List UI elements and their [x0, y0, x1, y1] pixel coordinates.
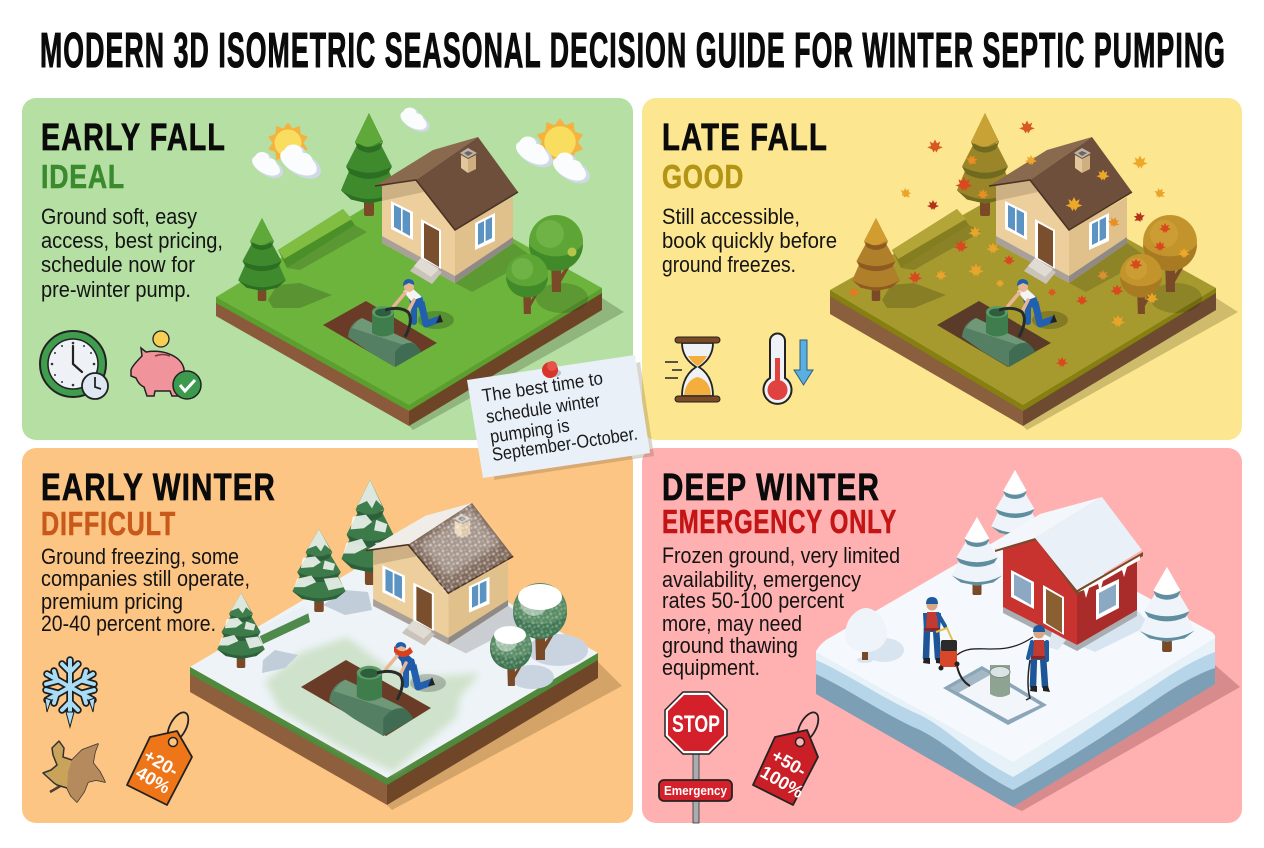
note text: schedule winter: [484, 389, 601, 427]
description text: [662, 543, 900, 680]
description text: Ground freezing, some: [41, 544, 239, 569]
description text: ground freezes.: [662, 252, 796, 277]
illustration: green yard diorama: [216, 113, 624, 430]
description text: 20-40 percent more.: [41, 611, 216, 636]
icon: price tag +50-100%: [753, 709, 823, 805]
heading: late fall: LATE FALL: [662, 117, 828, 159]
description text: equipment.: [662, 655, 760, 680]
description text: companies still operate,: [41, 566, 250, 591]
icon: thermometer with down arrow: [764, 334, 813, 404]
note text: The best time to: [480, 367, 604, 406]
description text: more, may need: [662, 611, 802, 636]
description text: access, best pricing,: [41, 228, 223, 253]
illustration: frosted yard diorama: [190, 480, 622, 810]
illustration: snow-covered yard diorama: [816, 470, 1240, 811]
icon: price tag +20-40%: +20-: [140, 745, 182, 781]
icon: small cloud: [397, 107, 433, 136]
panel: late fall: [642, 98, 1242, 440]
icon: price tag +20-40%: [127, 709, 193, 805]
note text: [480, 367, 639, 465]
heading: early fall: EARLY FALL: [41, 117, 226, 159]
icon: piggy bank: [131, 331, 201, 399]
note text: September-October.: [490, 422, 639, 465]
description text: Frozen ground, very limited: [662, 543, 900, 568]
icon: red push pin: [542, 361, 561, 378]
icon: right sun and cloud: [512, 118, 594, 189]
description text: Still accessible,: [662, 204, 800, 229]
icon: hourglass: [665, 337, 720, 402]
icon: stop sign: [659, 692, 732, 823]
heading: deep winter: DEEP WINTER: [662, 467, 880, 509]
description text: [41, 544, 250, 636]
icon: price tag +50-100%: 100%: [757, 762, 807, 802]
icon: stop sign: Emergency: [664, 783, 728, 798]
description text: pre-winter pump.: [41, 277, 191, 302]
panel: early winter: [22, 448, 633, 823]
status: ideal: IDEAL: [41, 158, 125, 195]
description text: book quickly before: [662, 228, 837, 253]
icon: maple leaf: [43, 741, 105, 802]
panel: deep winter: [642, 448, 1242, 823]
description text: availability, emergency: [662, 567, 861, 592]
description text: schedule now for: [41, 252, 195, 277]
falling autumn leaves: [848, 120, 1190, 367]
icon: price tag +20-40%: 40%: [132, 762, 174, 798]
icon: left sun and cloud: [249, 122, 326, 185]
icon: snowflake: [45, 660, 95, 727]
description text: [662, 204, 837, 277]
status: difficult: DIFFICULT: [41, 505, 176, 542]
icon: price tag +50-100%: +50-: [768, 745, 810, 781]
description text: ground thawing: [662, 633, 798, 658]
illustration: autumn yard diorama: [830, 113, 1238, 430]
icon: stop sign: STOP: [672, 711, 720, 738]
description text: Ground soft, easy: [41, 204, 197, 229]
status: good: GOOD: [662, 158, 744, 195]
heading: early winter: EARLY WINTER: [41, 467, 276, 509]
note text: pumping is: [488, 414, 571, 447]
description text: rates 50-100 percent: [662, 588, 844, 613]
description text: premium pricing: [41, 589, 183, 614]
description text: [41, 204, 223, 302]
callout note: best time to schedule: [467, 355, 654, 480]
status: emergency only: EMERGENCY ONLY: [662, 503, 897, 540]
icon: clock: [40, 331, 108, 399]
panel: early fall: [22, 98, 633, 440]
